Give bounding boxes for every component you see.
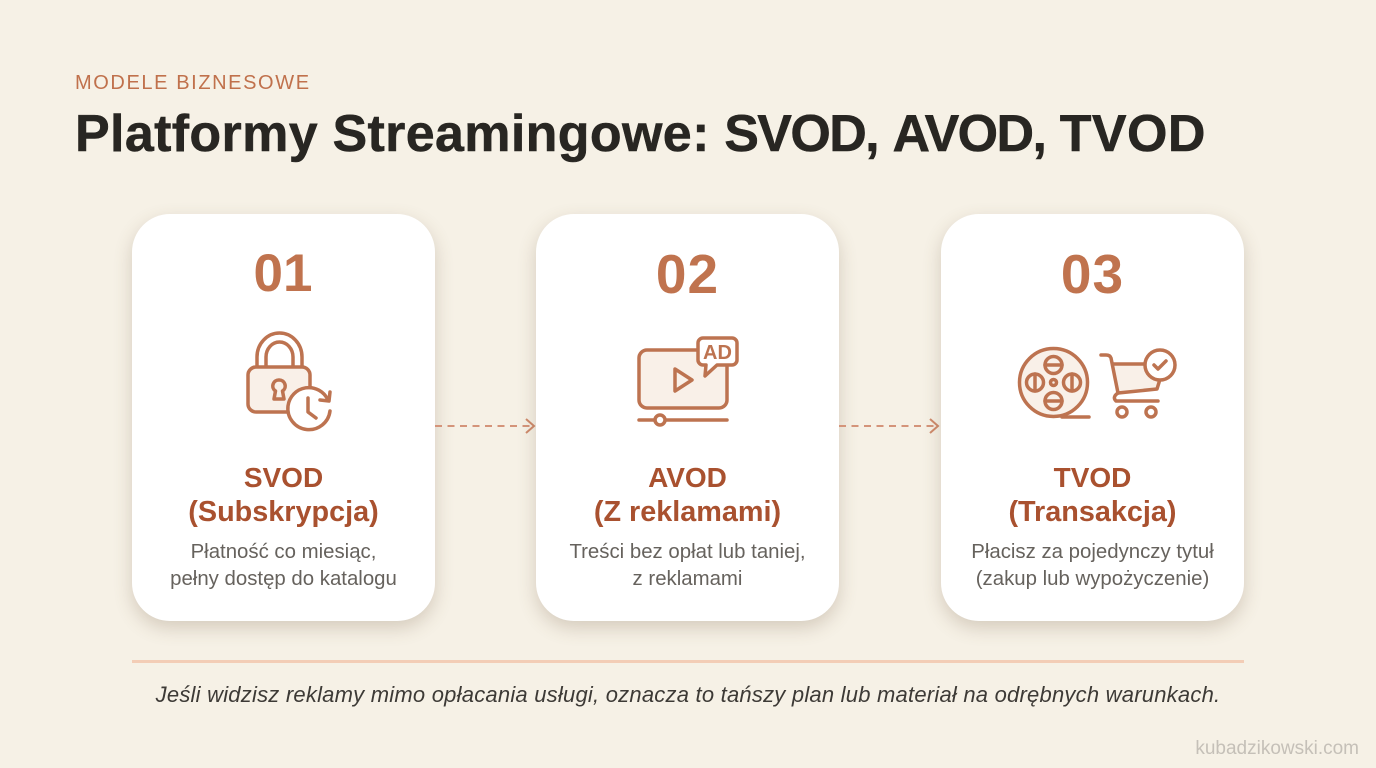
footnote: Jeśli widzisz reklamy mimo opłacania usługi, oznacza to tańszy plan lub materiał na odrębnych warunkach. <box>156 682 1220 707</box>
description: Płacisz za pojedynczy tytuł <box>971 541 1214 563</box>
AD text: AD <box>703 342 732 364</box>
watermark: kubadzikowski.com <box>1195 738 1359 759</box>
description: (zakup lub wypożyczenie) <box>976 568 1209 590</box>
eyebrow label: MODELE BIZNESOWE <box>75 72 311 94</box>
heading: AVOD: (Z reklamami) <box>594 496 781 528</box>
panel: AVOD <box>536 214 839 621</box>
description: z reklamami <box>633 568 742 590</box>
number 03: 03 <box>1061 243 1124 305</box>
description: pełny dostęp do katalogu <box>170 568 397 590</box>
heading: SVOD <box>188 462 379 528</box>
panel: SVOD <box>132 214 435 621</box>
number 02: 02 <box>656 243 719 305</box>
heading: AVOD <box>594 462 781 528</box>
description: Treści bez opłat lub taniej, <box>569 541 806 563</box>
heading: SVOD: (Subskrypcja) <box>188 496 379 528</box>
title: Platformy Streamingowe: SVOD, AVOD, TVOD <box>75 105 1206 163</box>
description <box>569 541 806 590</box>
icon: padlock with clock <box>246 331 332 432</box>
description <box>971 541 1214 590</box>
arrow: SVOD to AVOD <box>435 418 536 434</box>
heading: AVOD: AVOD <box>648 462 727 493</box>
heading: SVOD: SVOD <box>244 462 323 493</box>
description <box>170 541 397 590</box>
icon: film reel and shopping cart <box>1018 346 1177 419</box>
panel: TVOD <box>941 214 1244 621</box>
number 01: 01 <box>254 244 312 303</box>
description: Płatność co miesiąc, <box>191 541 376 563</box>
heading: TVOD: (Transakcja) <box>1008 496 1177 528</box>
heading: TVOD <box>1008 462 1177 528</box>
heading: TVOD: TVOD <box>1054 462 1131 493</box>
icon: video player with AD bubble <box>637 336 739 427</box>
arrow: AVOD to TVOD <box>839 418 940 434</box>
